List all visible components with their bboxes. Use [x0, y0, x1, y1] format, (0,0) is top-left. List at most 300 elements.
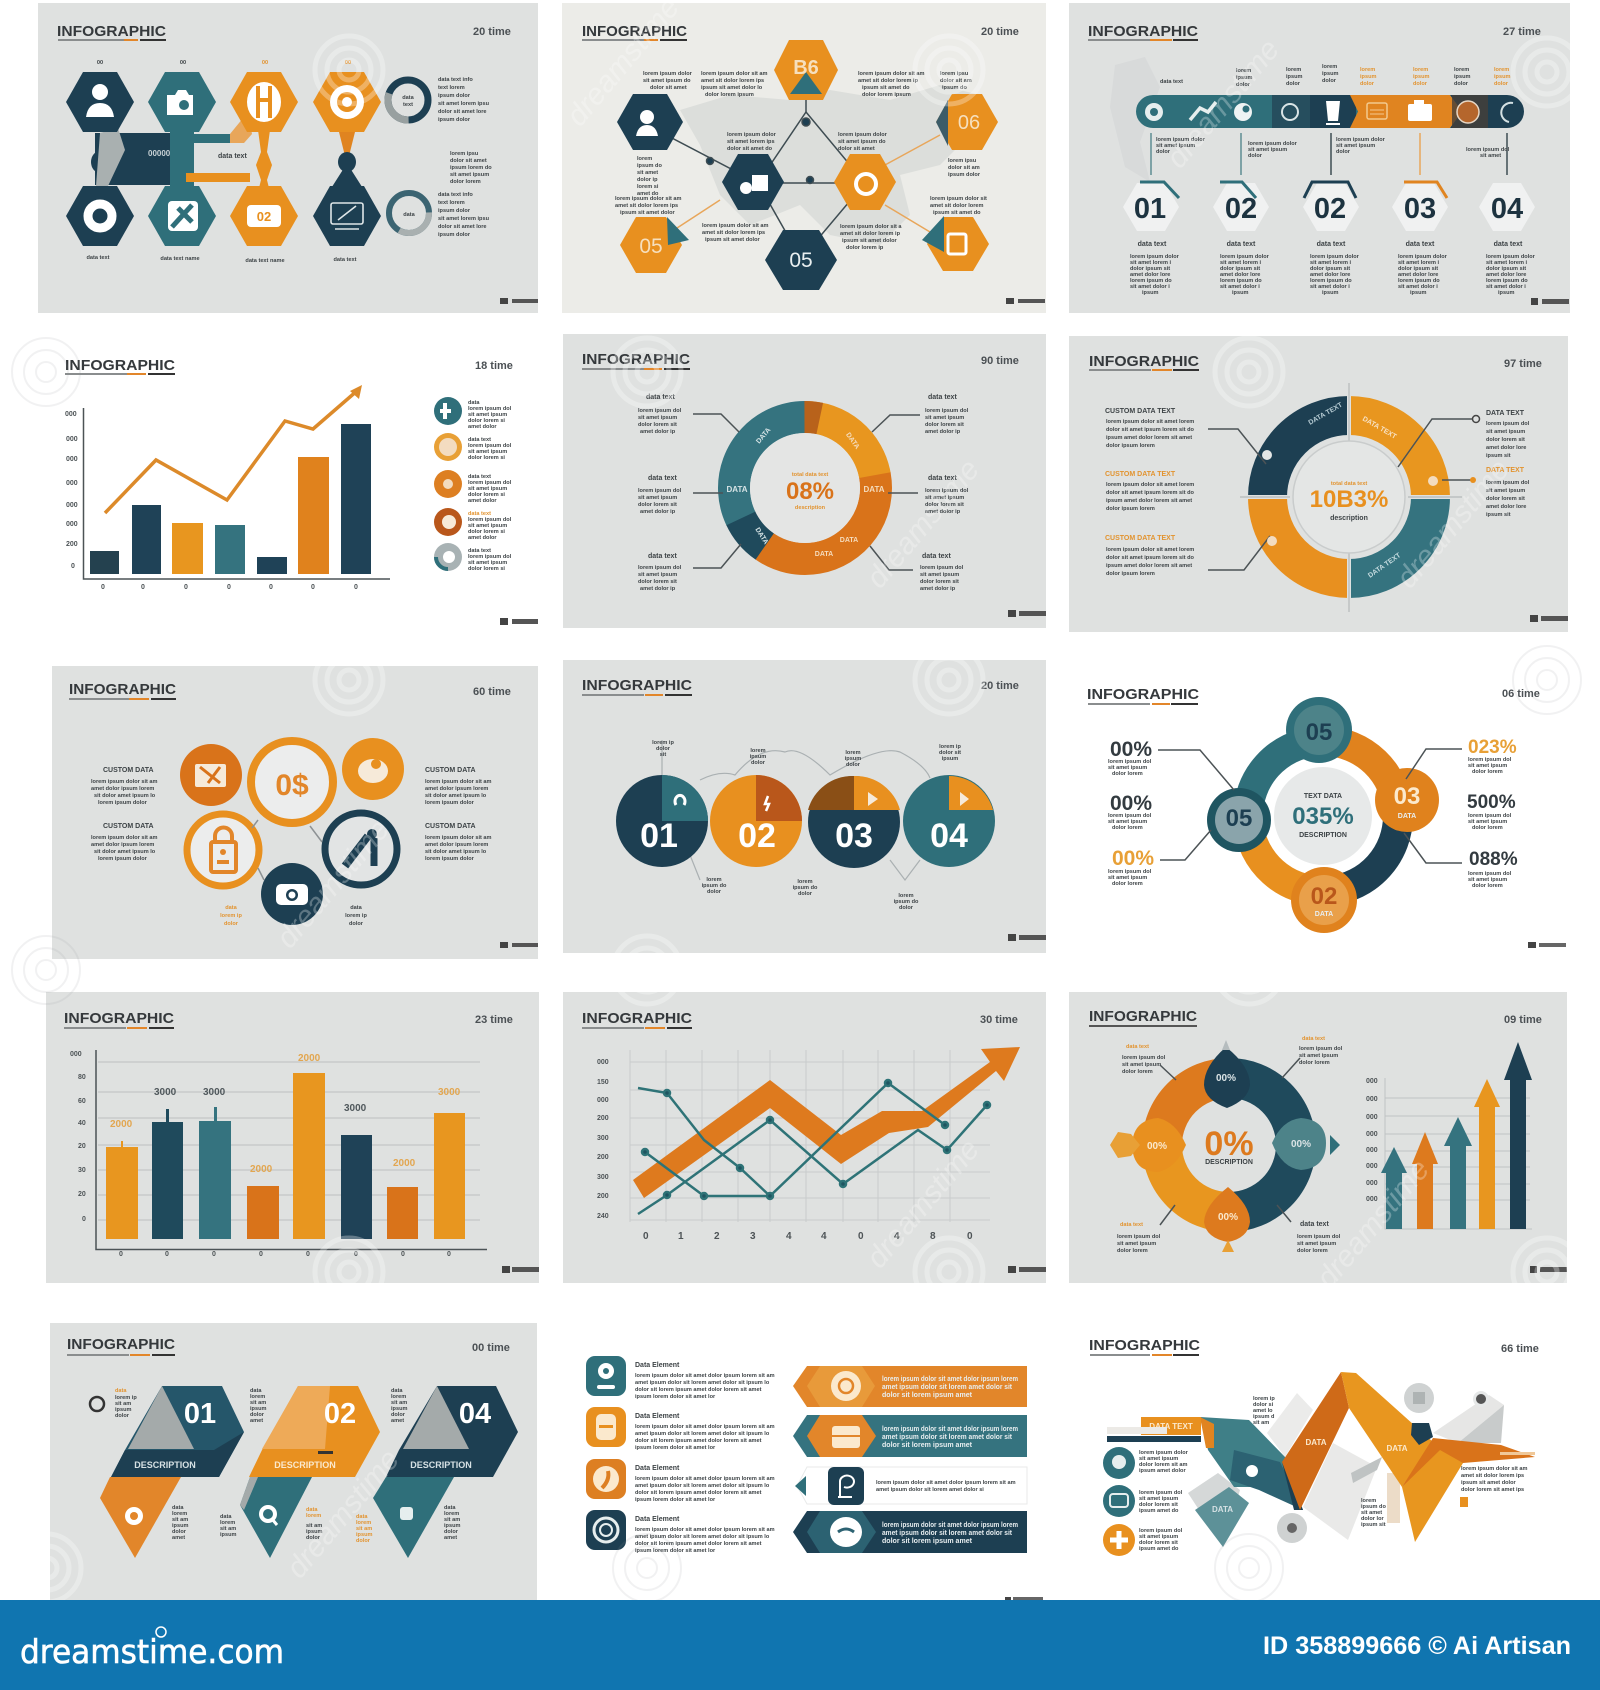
time label: 06 time [1502, 688, 1540, 700]
top captions: dolor [1413, 81, 1428, 87]
ribbon orange: amet ipsum dolor sit lorem amet dolor sit [882, 1384, 1013, 1391]
left text: sit dolor amet ipsum lo [94, 849, 156, 855]
left text: CUSTOM DATA TEXT [1105, 408, 1176, 415]
diagonal watermark text: dreamstime [280, 1443, 406, 1584]
diagonal watermark text [270, 0, 1516, 1584]
captions: dolor [349, 921, 364, 927]
large ring: 0$ [275, 769, 309, 802]
legend text: lorem ipsum dol [468, 480, 512, 486]
cycle ring [1162, 1078, 1296, 1212]
panel: cycle ring and arrows [1069, 992, 1567, 1283]
small text: data [115, 1388, 127, 1394]
hexagon row bottom: 02 [257, 209, 271, 224]
center circle: TEXT DATA [1304, 793, 1342, 800]
text blocks: lorem ipsum dolor sit am [702, 223, 769, 229]
ring nodes: 00% [1147, 1141, 1167, 1152]
legend text: dolor lorem si [468, 492, 505, 498]
heading: INFOGRAPHIC [64, 1010, 174, 1027]
labels and text: 00 [97, 60, 103, 66]
percent labels right: lorem ipsum dol [1468, 757, 1511, 763]
callouts: dolor lorem [1117, 1248, 1148, 1254]
small text: amet [172, 1535, 185, 1541]
column text [1130, 241, 1536, 296]
hexagon nodes [617, 40, 998, 290]
value labels: 2000 [110, 1119, 133, 1130]
panel: world network [562, 3, 1046, 313]
column text: ipsum [1232, 290, 1248, 296]
left text: ipsum amet dolor lorem sit amet [1106, 435, 1192, 441]
panel: hexagon process [38, 3, 538, 313]
donut chart: DATA [840, 537, 858, 544]
left text: dolor sit amet ipsum lorem sit do [1106, 427, 1195, 433]
small text: dolor [306, 1535, 321, 1541]
quadrant donut: DATA TEXT [1308, 401, 1345, 427]
top captions: dolor [1454, 81, 1469, 87]
text blocks: ipsum sit amet dolor [842, 238, 898, 244]
brand swirl [156, 1627, 166, 1637]
small text: dolor [444, 1529, 459, 1535]
icon list text: dolor sit lorem ipsum amet dolor lorem sit amet [635, 1541, 762, 1547]
ribbon dark: amet ipsum dolor sit lorem amet dolor sit [882, 1530, 1013, 1537]
labels and text: ipsum dolor [438, 232, 471, 238]
axis labels: 000 [1366, 1096, 1378, 1103]
right text: lorem ipsum dol [1486, 480, 1529, 486]
footer mark [1006, 298, 1045, 304]
center value: total data text [1331, 481, 1367, 487]
heading: INFOGRAPHIC [582, 351, 690, 368]
captions: data [225, 905, 237, 911]
callouts: data text [1120, 1222, 1143, 1228]
small text: ipsum [391, 1406, 407, 1412]
small text: amet [250, 1418, 263, 1424]
callouts: lorem ipsum dol [1122, 1055, 1165, 1061]
column text: dolor ipsum sit [1310, 266, 1350, 272]
labels and text: data text name [160, 256, 200, 262]
top captions [1156, 64, 1510, 159]
labels and text: dolor sit amet lore [438, 224, 486, 230]
center value: description [795, 505, 826, 511]
text blocks: sit amet lorem ips [727, 139, 775, 145]
satellite circles: DATA [1398, 813, 1416, 820]
donut chart: DATA [726, 485, 748, 494]
axis labels: 0 [354, 1251, 358, 1258]
text blocks: dolor sit amet [650, 85, 687, 91]
labels and text: 00 [345, 60, 351, 66]
column text: lorem ipsum do [1130, 278, 1172, 284]
right text: dolor lorem sit [925, 422, 964, 428]
numbered hexagons: 03 [1404, 193, 1436, 225]
left text: amet dolor ipsum lorem [91, 786, 154, 792]
axis labels: 000 [65, 411, 77, 418]
right text: amet dolor ipsum lorem [425, 786, 488, 792]
legend text: amet dolor [468, 424, 497, 430]
callouts: sit amet ipsum [1297, 1241, 1336, 1247]
left text: amet dolor ip [640, 429, 676, 435]
side icon text: lorem ip [1253, 1396, 1275, 1402]
top captions: lorem [1286, 67, 1301, 73]
shape 02 [240, 1386, 380, 1558]
left text: ipsum amet dolor lorem sit amet [1106, 498, 1192, 504]
ribbon white: amet ipsum dolor sit lorem amet dolor si [876, 1487, 984, 1493]
side icon text: ipsum d [1253, 1414, 1275, 1420]
right text: lorem ipsum dolor [425, 800, 475, 806]
captions [220, 905, 367, 927]
labels and text: sit amet lorem ipsu [438, 216, 490, 222]
small text: lorem [356, 1520, 371, 1526]
text blocks: amet sit dolor lorem [930, 203, 983, 209]
side icon text: ipsum sit amet dolor [1461, 1480, 1517, 1486]
left text [1105, 408, 1195, 577]
right text: data text [928, 394, 957, 401]
top captions: dolor [1236, 82, 1251, 88]
percent labels left: 00% [1110, 738, 1152, 761]
axis labels: 000 [66, 456, 78, 463]
top captions: lorem ipsum dolor [1156, 137, 1205, 143]
right text: lorem ipsum dolor sit am [425, 779, 492, 785]
right text: amet dolor ip [925, 429, 961, 435]
hexagon nodes: 05 [789, 249, 813, 272]
side icon text: lorem [1361, 1498, 1376, 1504]
axis labels: 4 [786, 1231, 792, 1242]
labels and text: dolor sit amet lore [438, 109, 486, 115]
right accent bar [1500, 1452, 1535, 1455]
text blocks: ipsum sit amet dolor lo [701, 85, 763, 91]
icon list text: Data Element [635, 1362, 680, 1369]
axis labels: 1 [678, 1231, 684, 1242]
large ring [251, 741, 333, 823]
shape 04 [373, 1386, 518, 1558]
satellite circles: 05 [1306, 719, 1332, 746]
top captions: lorem [1454, 67, 1469, 73]
percent labels left: dolor lorem [1112, 825, 1143, 831]
right text: dolor lorem sit [925, 502, 964, 508]
captions: data [350, 905, 362, 911]
side icon text: sit amet ipsum [1139, 1534, 1178, 1540]
axis labels: 8 [930, 1231, 936, 1242]
top captions: dolor [1248, 153, 1263, 159]
axis labels: 0 [354, 584, 358, 591]
small text: data [356, 1514, 368, 1520]
left text: sit amet ipsum [638, 495, 677, 501]
axis labels: 0 [227, 584, 231, 591]
column text: sit amet dolor i [1486, 284, 1526, 290]
small text: lorem [391, 1394, 406, 1400]
axis labels: 000 [1366, 1078, 1378, 1085]
text blocks: amet sit dolor lorem ips [701, 78, 764, 84]
icon list text: dolor sit lorem ipsum amet dolor lorem sit amet [635, 1490, 762, 1496]
panel: bar and line chart [65, 357, 538, 625]
right text: CUSTOM DATA [425, 767, 476, 774]
trend line [105, 385, 362, 513]
center value: DESCRIPTION [1205, 1159, 1253, 1166]
panel: donut left labels [563, 334, 1046, 628]
connectors [1158, 749, 1462, 863]
top captions: lorem [1360, 67, 1375, 73]
side icon text: sit amet ipsum [1139, 1496, 1178, 1502]
text blocks: lorem ipsum dolor sit am [701, 71, 768, 77]
side icon text: lorem ipsum dolor sit am [1461, 1466, 1528, 1472]
icon list text: amet ipsum dolor sit lorem amet dolor sit ipsum lo [635, 1380, 770, 1386]
time label: 20 time [981, 26, 1019, 38]
panel: circle icons [52, 666, 538, 959]
top captions: sit amet ipsum [1336, 143, 1375, 149]
labels and text: dolor lorem [450, 179, 481, 185]
time label: 66 time [1501, 1343, 1539, 1355]
top captions: data text [1160, 79, 1183, 85]
center circle: 035% [1292, 803, 1354, 830]
legend text: data text [468, 437, 491, 443]
axis labels: 4 [821, 1231, 827, 1242]
column text: amet dolor lore [1220, 272, 1260, 278]
legend text: data text [468, 548, 491, 554]
icon list text: lorem ipsum dolor sit amet dolor ipsum lorem sit am [635, 1476, 775, 1482]
axis labels: 20 [78, 1191, 86, 1198]
donut chart: DATA [753, 527, 769, 546]
brand name: dreamstime.com [20, 1632, 284, 1671]
top captions: ipsum [1494, 74, 1510, 80]
circle 04: 04 [930, 817, 968, 855]
top captions: dolor [1322, 78, 1337, 84]
text blocks: lorem [637, 156, 652, 162]
column text: amet dolor lore [1130, 272, 1170, 278]
top captions: ipsum [1322, 71, 1338, 77]
center circle [1273, 766, 1373, 866]
donut chart: DATA [755, 427, 772, 445]
legend text: dolor lorem si [468, 566, 505, 572]
text blocks: amet sit dolor lorem ips [615, 203, 678, 209]
right text: dolor lorem sit [920, 579, 959, 585]
left text: CUSTOM DATA [103, 823, 154, 830]
ribbon orange: dolor sit lorem ipsum amet [882, 1392, 973, 1399]
column text: sit amet lorem i [1130, 260, 1171, 266]
column text: dolor ipsum sit [1130, 266, 1170, 272]
captions: dolor [798, 891, 813, 897]
text blocks: sit amet ipsum do [838, 139, 886, 145]
axis labels: 0 [82, 1216, 86, 1223]
time label: 27 time [1503, 26, 1541, 38]
labels and text: ipsum dolor [438, 93, 471, 99]
side icon text: amet lo [1253, 1408, 1273, 1414]
percent labels right: sit amet ipsum [1468, 819, 1507, 825]
footer mark [1008, 1266, 1046, 1273]
left text [91, 767, 158, 862]
axes [84, 408, 390, 579]
shape 01 [100, 1386, 244, 1558]
ring nodes: 00% [1216, 1073, 1236, 1084]
side icon text: dolor lorem sit am [1139, 1462, 1188, 1468]
axis labels: 0 [306, 1251, 310, 1258]
bars [90, 424, 371, 574]
ring charts [388, 80, 429, 233]
legend text: sit amet ipsum [468, 486, 507, 492]
left text: dolor lorem sit [638, 579, 677, 585]
top captions: ipsum [1413, 74, 1429, 80]
donut chart: DATA [844, 432, 860, 451]
small text: data [444, 1505, 456, 1511]
time label: 20 time [981, 680, 1019, 692]
small text: sit am [444, 1517, 460, 1523]
axis labels: 0 [212, 1251, 216, 1258]
center value: description [1330, 515, 1368, 522]
ring charts: data [403, 212, 416, 218]
teal fold: DATA [1212, 1505, 1233, 1514]
side icon text: amet sit dolor lorem ips [1461, 1473, 1524, 1479]
circle 03 [808, 776, 900, 868]
right text: lorem ipsum dol [925, 488, 968, 494]
grid [630, 1050, 990, 1222]
lock ring [187, 814, 259, 886]
icon list text: amet ipsum dolor sit lorem amet dolor sit ipsum lo [635, 1483, 770, 1489]
axis labels: 30 [78, 1167, 86, 1174]
small text: ipsum [220, 1532, 236, 1538]
left text: CUSTOM DATA TEXT [1105, 471, 1176, 478]
shape 01: DESCRIPTION [134, 1460, 196, 1470]
captions: lorem ip [652, 740, 674, 746]
icon list text: dolor sit lorem ipsum amet dolor lorem sit amet [635, 1438, 762, 1444]
axis labels: 80 [78, 1074, 86, 1081]
captions: lorem ip [220, 913, 242, 919]
ribbon dark [793, 1511, 1027, 1553]
legend text [468, 400, 512, 572]
top captions: lorem [1413, 67, 1428, 73]
text blocks: sit amet ipsum do [643, 78, 691, 84]
right text: sit amet ipsum [1486, 488, 1525, 494]
center value: 0% [1204, 1125, 1254, 1163]
captions: dolor [224, 921, 239, 927]
top captions: dolor [1286, 81, 1301, 87]
orange zigzag: DATA [1386, 1444, 1408, 1453]
legend text: amet dolor [468, 535, 497, 541]
arrows [1381, 1042, 1532, 1229]
callouts: lorem ipsum dol [1117, 1234, 1160, 1240]
axis labels: 300 [597, 1174, 609, 1181]
footer mark [500, 298, 538, 304]
top captions: sit amet [1480, 153, 1501, 159]
side icon text: sit am [1253, 1420, 1269, 1426]
left text: lorem ipsum dol [638, 488, 681, 494]
small text: ipsum [172, 1523, 188, 1529]
captions: ipsum do [793, 885, 818, 891]
heading: INFOGRAPHIC [1087, 686, 1199, 703]
left text: dolor lorem sit [638, 502, 677, 508]
captions: dolor [656, 746, 671, 752]
legend text: dolor lorem si [468, 418, 505, 424]
time label: 00 time [472, 1342, 510, 1354]
top captions: lorem ipsum dolor [1248, 141, 1297, 147]
ring nodes: 00% [1218, 1212, 1238, 1223]
right text [425, 767, 492, 862]
right text: amet dolor ip [925, 509, 961, 515]
heading: INFOGRAPHIC [582, 23, 687, 40]
numbered hexagons [1123, 182, 1535, 231]
top captions: dolor [1336, 149, 1351, 155]
small text [90, 1388, 460, 1544]
percent labels left: lorem ipsum dol [1108, 869, 1151, 875]
labels and text [86, 60, 492, 264]
panel: icon list and ribbons [586, 1356, 1043, 1600]
axis labels: 000 [70, 1051, 82, 1058]
percent labels left: sit amet ipsum [1108, 875, 1147, 881]
captions: dolor [846, 762, 861, 768]
time label: 97 time [1504, 358, 1542, 370]
axis labels [597, 1059, 973, 1242]
right text: data text [922, 553, 951, 560]
left text: lorem ipsum dolor sit amet lorem [1106, 419, 1194, 425]
axis labels: 240 [597, 1213, 609, 1220]
value labels: 2000 [250, 1164, 273, 1175]
labels and text: data text [218, 153, 247, 160]
percent labels right: 500% [1467, 792, 1516, 813]
text blocks: ipsum sit amet dolor [620, 210, 676, 216]
center value [1310, 481, 1388, 522]
captions: lorem ip [345, 913, 367, 919]
labels and text: 00 [180, 60, 186, 66]
ring nodes: 00% [1291, 1139, 1311, 1150]
connectors [1151, 133, 1507, 175]
left text: lorem ipsum dolor sit amet lorem [1106, 547, 1194, 553]
callouts: sit amet ipsum [1117, 1241, 1156, 1247]
side icon text: sit amet ipsum [1139, 1456, 1178, 1462]
right text: sit amet ipsum [920, 572, 959, 578]
labels and text: lorem ipsu [450, 151, 478, 157]
text blocks [615, 71, 987, 251]
circle 04 [903, 775, 995, 867]
percent labels right: sit amet ipsum [1468, 877, 1507, 883]
left text: amet dolor ip [640, 586, 676, 592]
text blocks: ipsum sit amet do [933, 210, 981, 216]
percent labels right: dolor lorem [1472, 825, 1503, 831]
camera circle [261, 863, 323, 925]
legend text: sit amet ipsum [468, 523, 507, 529]
percent labels right [1467, 737, 1518, 889]
axis labels: 0 [141, 584, 145, 591]
text blocks: dolor lorem ipsum [862, 92, 911, 98]
axis labels [70, 1051, 451, 1258]
column text: lorem ipsum dolor [1130, 254, 1179, 260]
column text: ipsum [1410, 290, 1426, 296]
banner [0, 1600, 1600, 1690]
heading: INFOGRAPHIC [1089, 1337, 1200, 1354]
text blocks: amet sit dolor lorem ips [702, 230, 765, 236]
labels and text: 00000 [148, 149, 171, 158]
column text: dolor ipsum sit [1398, 266, 1438, 272]
legend text: dolor lorem si [468, 529, 505, 535]
icon list text: dolor sit lorem ipsum amet dolor lorem sit amet [635, 1387, 762, 1393]
panel: orbit ring percentages [1087, 686, 1566, 948]
text blocks: lorem ipsum dolor sit am [858, 71, 925, 77]
text blocks: lorem ipsu [948, 158, 976, 164]
circle 02: 02 [738, 817, 776, 855]
axis labels: 0 [119, 1251, 123, 1258]
time label: 09 time [1504, 1014, 1542, 1026]
circle 03: 03 [835, 817, 873, 855]
icon list text: lorem ipsum dolor sit amet dolor ipsum lorem sit am [635, 1424, 775, 1430]
panel: origami zigzag [1089, 1337, 1539, 1556]
shape 02: 02 [324, 1398, 356, 1430]
captions: ipsum [750, 754, 766, 760]
small text: data [220, 1514, 232, 1520]
footer mark [502, 1266, 539, 1273]
ribbon orange [793, 1366, 1027, 1407]
text blocks: dolor sit amet do [727, 146, 773, 152]
text blocks: ipsum sit amet dolor [705, 237, 761, 243]
percent labels right: 023% [1468, 737, 1517, 758]
time label: 23 time [475, 1014, 513, 1026]
column text: ipsum [1322, 290, 1338, 296]
captions: lorem ip [939, 744, 961, 750]
side icon text: lorem ipsum dolor [1139, 1450, 1188, 1456]
left text [638, 394, 682, 592]
